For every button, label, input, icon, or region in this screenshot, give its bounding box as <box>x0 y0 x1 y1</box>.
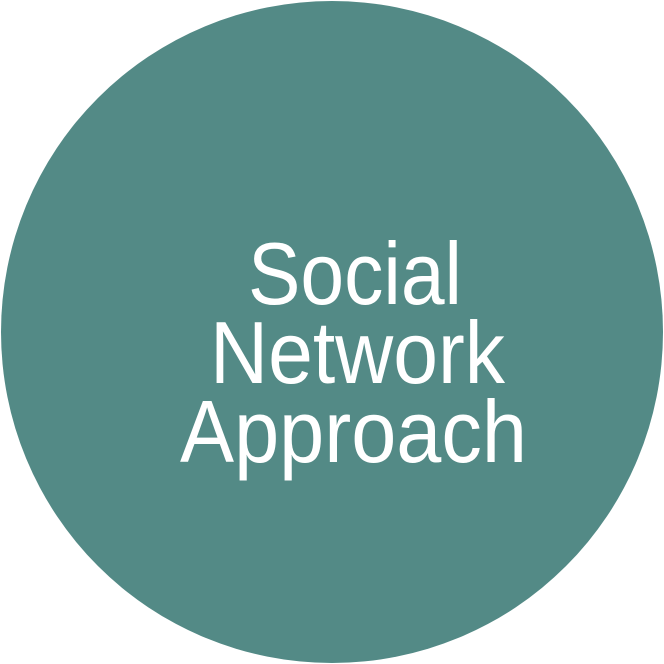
title <box>180 224 527 481</box>
title: Network <box>210 303 506 402</box>
title: Approach <box>180 382 527 481</box>
title: Social <box>248 224 462 323</box>
